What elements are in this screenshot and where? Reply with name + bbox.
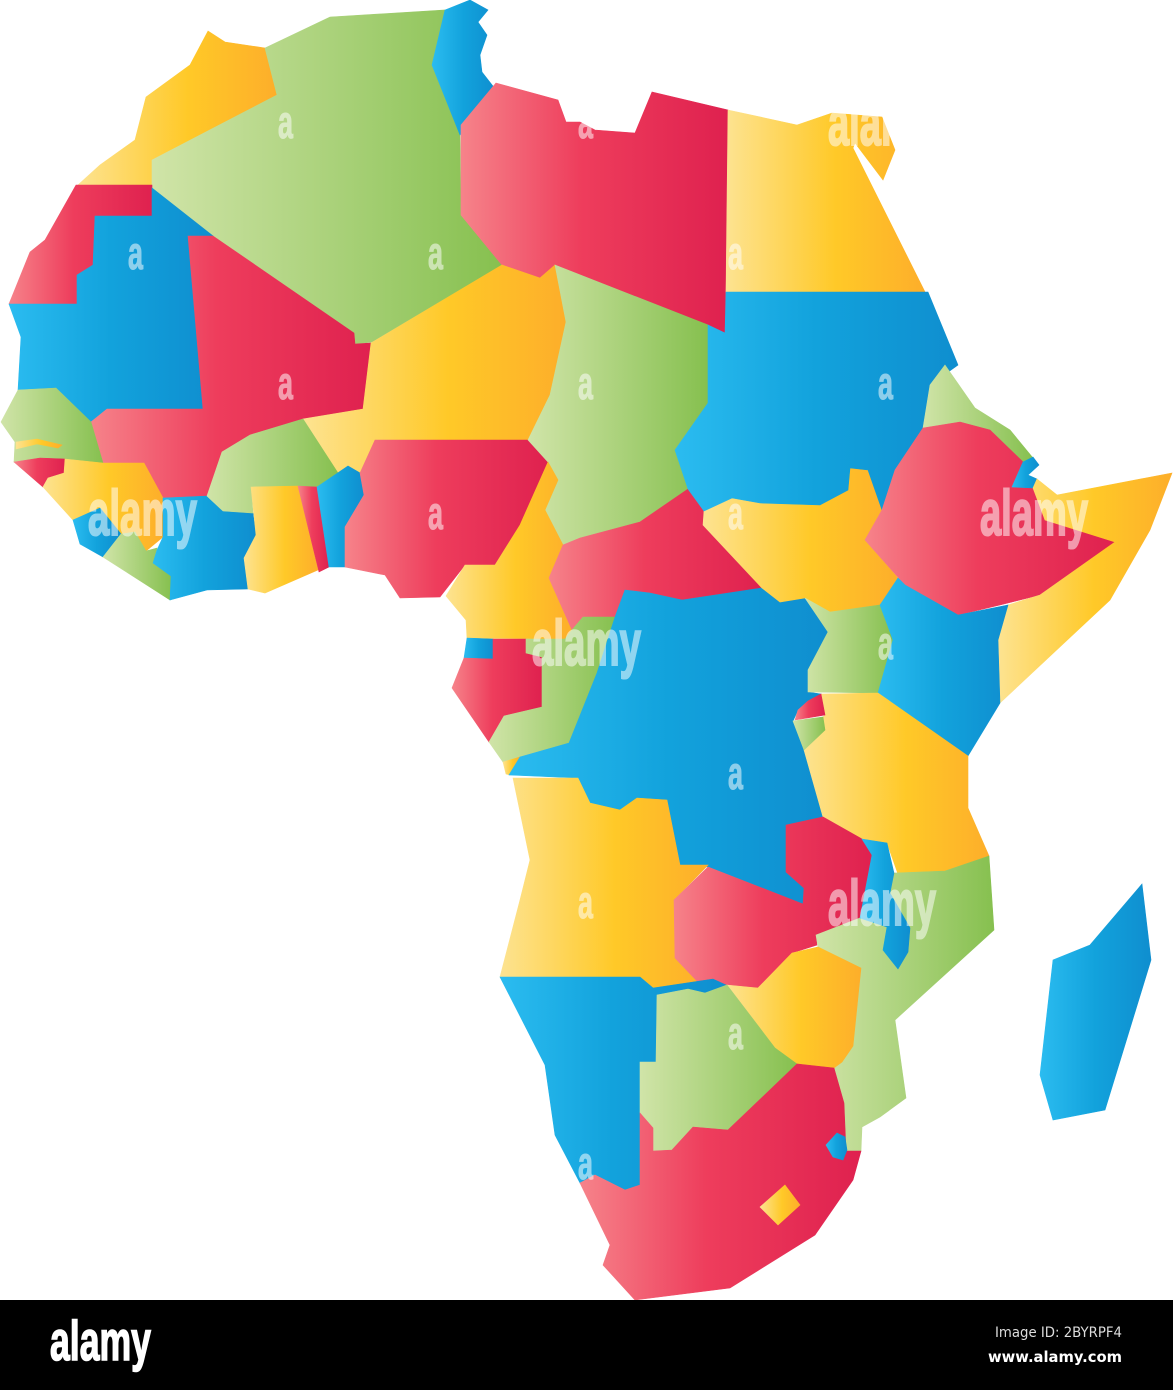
- country: Djibouti: [1012, 457, 1039, 488]
- country: Morocco: [78, 31, 277, 185]
- watermarks: a: [278, 357, 293, 409]
- country: Botswana: [640, 985, 797, 1151]
- watermarks: alamy: [828, 867, 936, 939]
- country: Guinea: [43, 459, 163, 551]
- country: Lesotho: [760, 1185, 800, 1225]
- country: Liberia: [103, 532, 171, 600]
- footer bar: [0, 1300, 1173, 1390]
- watermarks: a: [578, 96, 593, 148]
- watermarks: a: [428, 487, 443, 539]
- country: Sierra Leone: [73, 508, 121, 557]
- country: Ethiopia: [865, 422, 1115, 615]
- country: Republic of Congo: [489, 617, 615, 762]
- country: Niger: [303, 265, 566, 473]
- country: Nigeria: [345, 440, 548, 598]
- country: Eritrea: [923, 365, 1033, 462]
- watermarks: a: [728, 487, 743, 539]
- watermarks: a: [578, 876, 593, 928]
- country: Uganda: [805, 598, 893, 693]
- watermarks: [88, 87, 1088, 1189]
- country: Mali: [91, 236, 371, 498]
- country: Central African Republic: [549, 489, 762, 630]
- country: Sudan: [675, 292, 958, 511]
- country: Chad: [528, 265, 708, 545]
- country: Tanzania: [804, 693, 989, 874]
- country: Togo: [298, 486, 329, 572]
- footer logo: alamy: [50, 1309, 151, 1372]
- country: Angola: [500, 778, 708, 988]
- country: Cabinda: [503, 757, 520, 775]
- country: Kenya: [878, 578, 1008, 756]
- watermarks: a: [878, 617, 893, 669]
- watermarks: alamy: [88, 477, 197, 549]
- website: www.alamy.com: [988, 1348, 1122, 1366]
- country: Burundi: [793, 717, 825, 750]
- watermarks: a: [428, 227, 443, 279]
- watermarks: a: [878, 357, 893, 409]
- country: Guinea-Bissau: [14, 458, 65, 487]
- country: Democratic Republic of Congo: [509, 588, 828, 904]
- watermarks: a: [728, 227, 743, 279]
- watermarks: a: [578, 357, 593, 409]
- country: Tunisia: [432, 0, 496, 135]
- country: Libya: [461, 83, 728, 333]
- country: Somalia: [998, 473, 1172, 703]
- country: Rwanda: [795, 694, 825, 720]
- country: Egypt: [726, 110, 925, 292]
- country: Mauritania: [9, 188, 213, 422]
- country: Mozambique: [816, 856, 994, 1151]
- country: Ghana: [244, 486, 318, 593]
- watermarks: a: [578, 1137, 593, 1189]
- country: Madagascar: [1040, 884, 1151, 1120]
- country: Gambia: [16, 439, 62, 449]
- country: Algeria: [152, 10, 502, 344]
- country: Zambia: [674, 817, 872, 988]
- watermarks: alamy: [828, 87, 936, 159]
- image id: Image ID: 2BYRPF4: [995, 1325, 1122, 1341]
- country: South Sudan: [703, 468, 898, 612]
- country: Ivory Coast: [153, 496, 256, 600]
- country: Malawi: [860, 839, 910, 969]
- watermarks: a: [728, 747, 743, 799]
- watermarks: alamy: [980, 477, 1088, 549]
- watermarks: a: [278, 96, 293, 148]
- country: Cameroon: [446, 462, 572, 639]
- country: Gabon: [452, 639, 542, 742]
- watermarks: alamy: [532, 607, 641, 679]
- watermarks: a: [728, 1007, 743, 1059]
- country: Benin: [317, 466, 364, 567]
- country: Equatorial Guinea: [464, 638, 493, 659]
- country: Zimbabwe: [727, 947, 861, 1068]
- country: South Africa: [580, 1064, 861, 1300]
- watermarks: a: [128, 227, 143, 279]
- country: Senegal: [1, 388, 103, 463]
- country: Swaziland: [826, 1133, 847, 1160]
- country: Namibia: [500, 977, 726, 1190]
- country: Burkina Faso: [207, 419, 338, 513]
- country: Western Sahara: [9, 185, 152, 304]
